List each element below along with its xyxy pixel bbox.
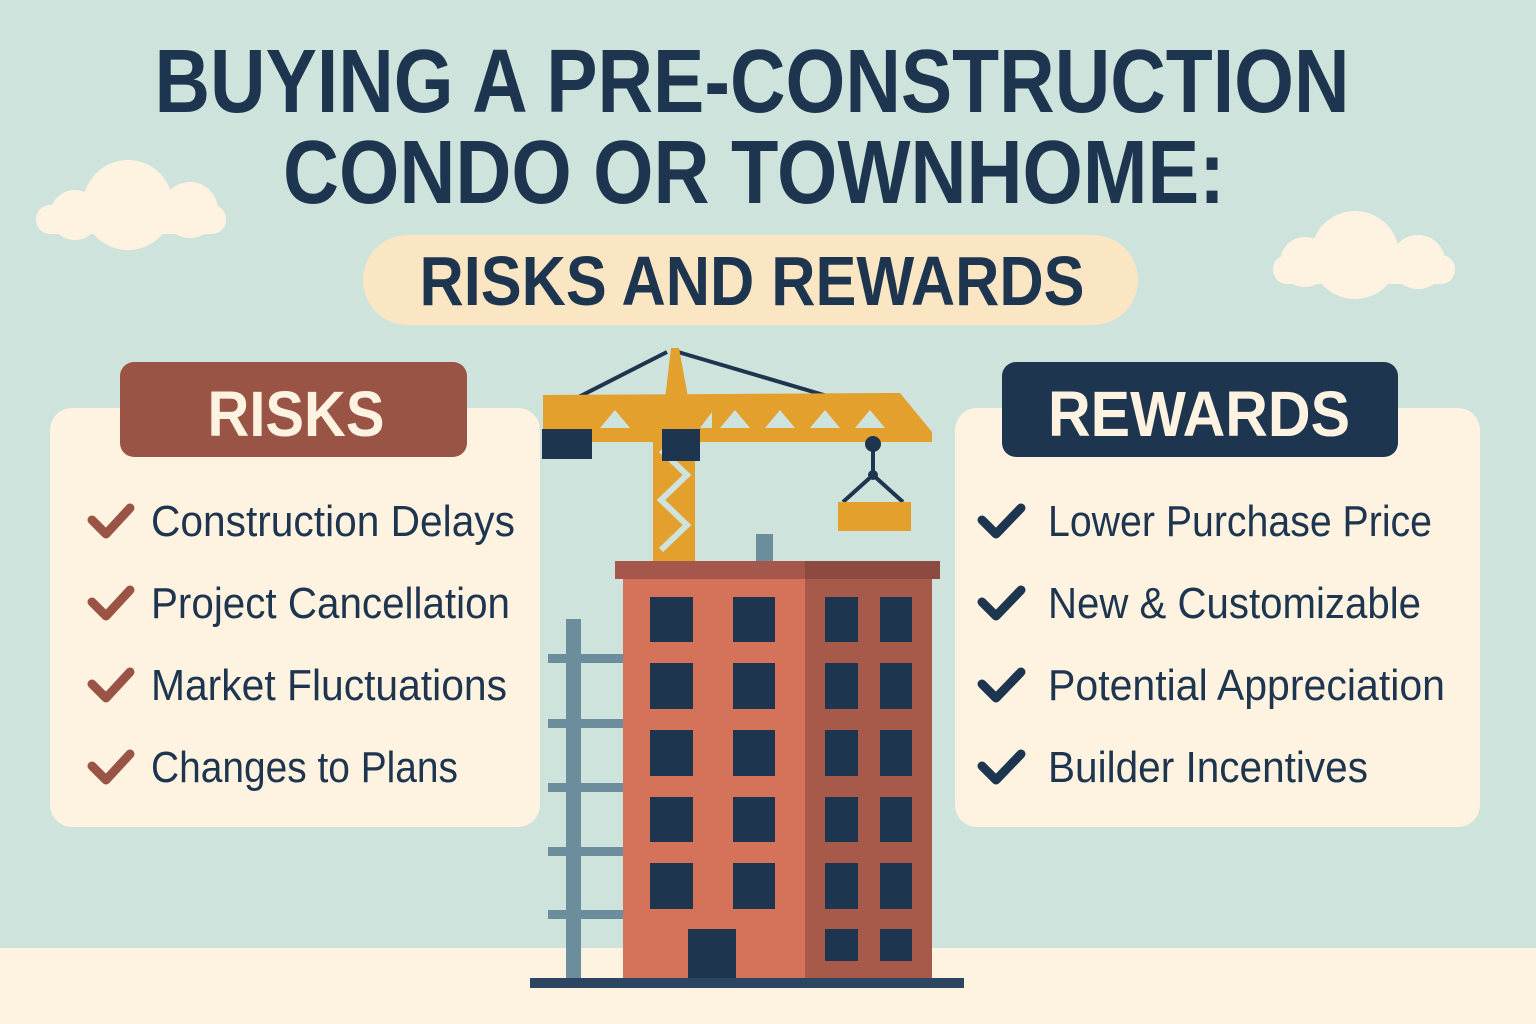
scaffold bbox=[548, 619, 624, 984]
risks list: Market Fluctuations bbox=[151, 661, 507, 710]
rewards list bbox=[982, 497, 1445, 792]
risks list bbox=[92, 497, 515, 792]
risks heading tab: RISKS bbox=[208, 378, 384, 450]
panel: rewards bbox=[955, 362, 1480, 827]
illustration: crane and building bbox=[530, 348, 964, 988]
risks list: Changes to Plans bbox=[151, 743, 458, 792]
rewards heading tab bbox=[1002, 362, 1398, 457]
risks heading tab bbox=[120, 362, 467, 457]
rewards list: New & Customizable bbox=[1048, 579, 1421, 628]
subtitle pill: RISKS AND REWARDS bbox=[420, 242, 1084, 320]
title: CONDO OR TOWNHOME: bbox=[283, 123, 1225, 223]
rewards heading tab: REWARDS bbox=[1048, 378, 1350, 450]
risks list: Project Cancellation bbox=[151, 579, 510, 628]
rewards list: Builder Incentives bbox=[1048, 743, 1368, 792]
panel: risks bbox=[50, 362, 540, 827]
title: BUYING A PRE-CONSTRUCTION bbox=[154, 32, 1350, 132]
title bbox=[154, 32, 1350, 223]
crane bbox=[542, 348, 932, 561]
building bbox=[615, 534, 940, 982]
cloud left bbox=[36, 160, 226, 250]
rewards list: Potential Appreciation bbox=[1048, 661, 1445, 710]
rewards list: Lower Purchase Price bbox=[1048, 497, 1432, 546]
ground line bbox=[530, 978, 964, 988]
cloud right bbox=[1273, 211, 1455, 299]
risks list: Construction Delays bbox=[151, 497, 515, 546]
